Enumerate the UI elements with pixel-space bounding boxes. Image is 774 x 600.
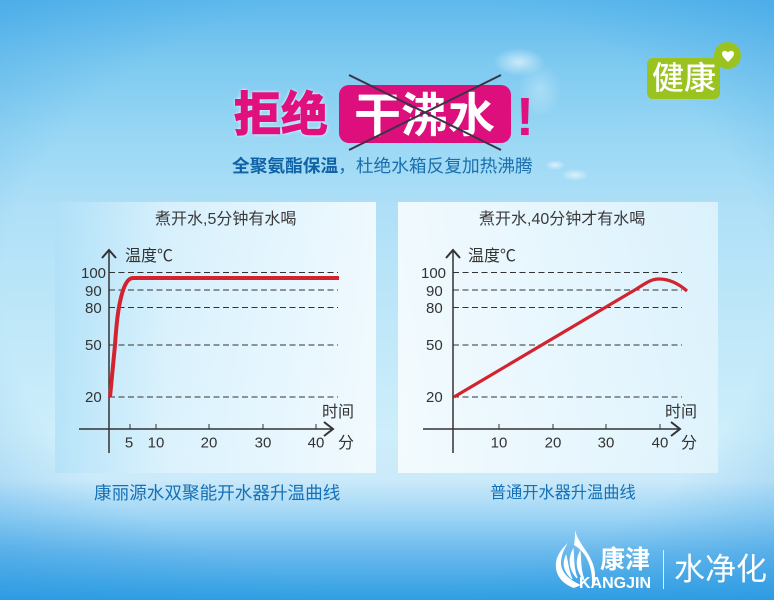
right chart caption: 普通开水器升温曲线 (490, 484, 636, 502)
left line chart: 温度℃ (125, 242, 173, 266)
right line chart: 分 (681, 434, 697, 452)
left line chart: 20 (85, 389, 102, 406)
left line chart: 90 (85, 283, 102, 300)
right line chart: 50 (426, 337, 443, 354)
left line chart: 50 (85, 337, 102, 354)
panel: left chart (55, 202, 376, 473)
icon: health badge (647, 42, 741, 99)
panel: right chart (398, 202, 718, 473)
left chart title: 煮开水,5分钟有水喝 (155, 211, 296, 228)
left line chart: 80 (85, 300, 102, 317)
right line chart: 20 (426, 389, 443, 406)
right line chart: 80 (426, 300, 443, 317)
icon: cross over words (348, 74, 502, 151)
left line chart: 30 (255, 434, 271, 452)
left line chart: 时间 (322, 403, 354, 421)
right line chart: 时间 (665, 403, 697, 421)
icon: water drop flame (556, 530, 595, 588)
brand name: 康津 (600, 546, 650, 574)
right line chart: 100 (421, 265, 446, 282)
left chart caption: 康丽源水双聚能开水器升温曲线 (94, 483, 340, 503)
left line chart: 20 (201, 434, 217, 452)
left line chart (79, 242, 354, 453)
title: reject: 拒绝 (234, 88, 328, 141)
right line chart (421, 242, 697, 453)
slogan: 水净化 (674, 552, 767, 587)
subtitle: 全聚氨酯保温，杜绝水箱反复加热沸腾 (232, 156, 533, 176)
brand latin name: KANGJIN (579, 575, 651, 592)
logo: Kangjin water purification (556, 530, 767, 592)
right line chart: 40 (652, 434, 668, 452)
left line chart: 5 (125, 434, 133, 452)
left line chart: 分 (338, 434, 354, 452)
left line chart: 10 (148, 434, 164, 452)
title: pink badge with crossed-out words: 干沸水 (354, 89, 495, 142)
right chart title: 煮开水,40分钟才有水喝 (479, 211, 645, 228)
left line chart: 100 (81, 265, 106, 282)
right line chart: 20 (545, 434, 561, 452)
left line chart: 40 (308, 434, 324, 452)
right line chart: 30 (598, 434, 614, 452)
title: exclamation mark: ! (516, 87, 534, 147)
right line chart: 90 (426, 283, 443, 300)
icon: health badge: 健康 (652, 60, 716, 96)
right line chart: 10 (491, 434, 507, 452)
right line chart: 温度℃ (468, 242, 516, 266)
